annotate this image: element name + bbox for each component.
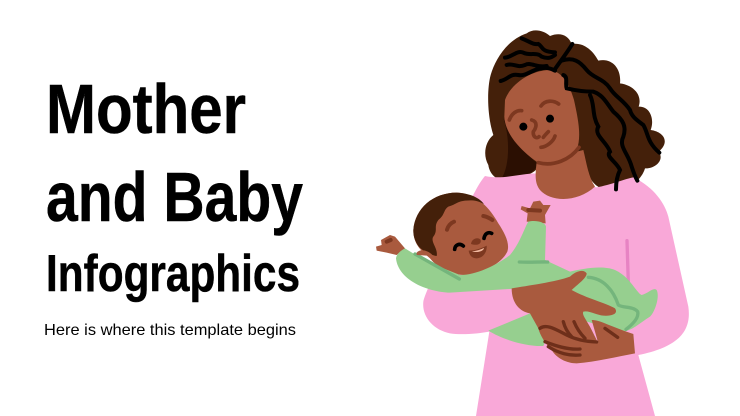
mother hair back bbox=[485, 30, 665, 191]
baby head bbox=[413, 193, 508, 275]
subtitle: Here is where this template begins bbox=[44, 322, 296, 339]
neck shadow line bbox=[538, 147, 579, 164]
baby face bbox=[387, 210, 540, 242]
baby ear bbox=[417, 250, 433, 256]
mother facial features bbox=[509, 101, 559, 147]
illustration: mother and baby bbox=[423, 30, 689, 416]
baby eyes bbox=[455, 233, 492, 249]
baby raised hand right bbox=[521, 201, 551, 223]
mother hand finger lines bbox=[540, 322, 618, 355]
sleeve crease bbox=[627, 241, 628, 283]
mother face bbox=[504, 70, 579, 163]
baby clothing creases bbox=[415, 254, 638, 329]
mother body and dress bbox=[423, 173, 689, 416]
baby raised hand left bbox=[376, 235, 405, 255]
title: Mother bbox=[46, 70, 246, 148]
mother neck bbox=[536, 150, 595, 199]
baby mouth bbox=[469, 246, 487, 258]
baby body and legs bbox=[396, 221, 658, 346]
mother hair shadow bbox=[501, 118, 537, 181]
mother upper arm and hand bbox=[512, 271, 635, 363]
title bbox=[46, 70, 303, 303]
baby mouth highlight bbox=[472, 248, 484, 252]
title: and Baby bbox=[46, 158, 303, 236]
baby nose bbox=[471, 238, 481, 245]
baby hair bbox=[413, 193, 484, 256]
mother eyes bbox=[519, 123, 527, 131]
title: Infographics bbox=[46, 245, 300, 303]
mother hair curls bbox=[501, 38, 659, 189]
